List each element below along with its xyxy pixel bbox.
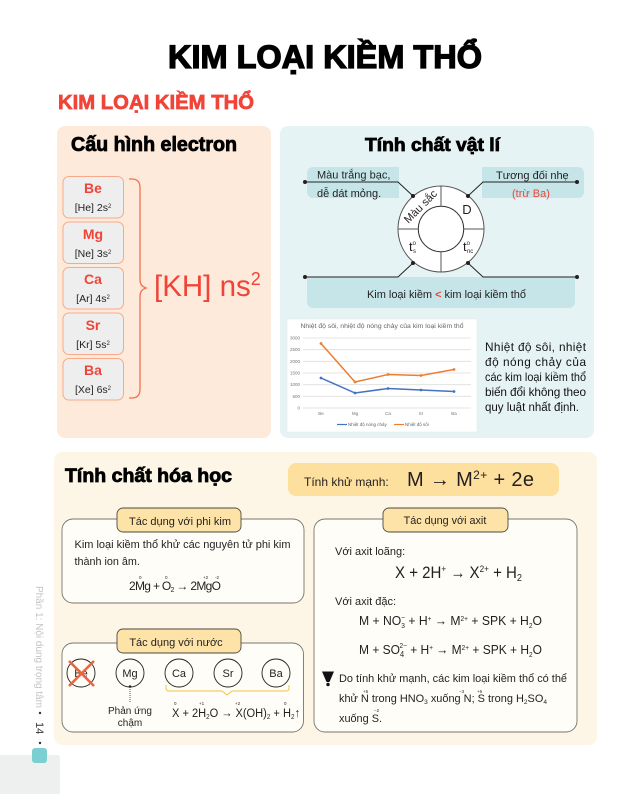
line chart: melting and boiling points: 0: [297, 406, 300, 410]
text: chart commentary: các kim loại kiềm thổ: [485, 370, 586, 384]
equation: nitrate: +: [428, 616, 431, 623]
equation: nitrate: 3: [401, 623, 405, 630]
element: Be crossed out: [67, 659, 95, 687]
card: reaction with acids: [314, 508, 577, 732]
footer tab: [0, 755, 60, 794]
element: Ba: Ba: [269, 668, 284, 680]
equation: metal and water: 2: [291, 714, 295, 721]
equation: nitrate: O: [533, 613, 542, 628]
element card: Be: Be: [84, 180, 102, 196]
element card: Ba: [63, 358, 124, 400]
equation: metal and water: 0: [284, 701, 287, 706]
equation: magnesium and oxygen: 0: [165, 575, 168, 580]
element: Mg: Mg: [122, 668, 138, 680]
equation: nitrate: −: [401, 615, 405, 622]
element card: Ca: 2: [106, 295, 110, 301]
element card: Sr: [Kr] 5s: [76, 339, 106, 351]
element card: Sr: [63, 313, 124, 354]
property wheel: D: [462, 202, 472, 217]
equation: sulfate: +: [429, 645, 433, 652]
text: note on strong reduction: [339, 673, 567, 725]
line chart: melting and boiling points: 2000: [290, 359, 300, 364]
callout: strong reducing property: 2+: [473, 468, 487, 482]
element: Ca: [165, 659, 193, 687]
text: note on strong reduction: xuống S.: [339, 713, 382, 725]
line chart: melting and boiling points: [287, 319, 477, 432]
line chart: melting and boiling points: 500: [292, 394, 300, 399]
card: reaction with non-metals: [62, 508, 304, 603]
equation: dilute acid: 2+: [480, 564, 489, 574]
sidebar: page label: 14: [33, 722, 45, 734]
equation: magnesium and oxygen: 2Mg + O: [129, 579, 171, 593]
text: note on strong reduction: 2: [524, 699, 528, 706]
element card: Mg: [63, 222, 124, 264]
equation: metal and water: 2: [267, 714, 270, 721]
line chart: melting and boiling points: 1500: [290, 370, 300, 376]
equation: metal and water: +2: [235, 701, 241, 706]
text: chart commentary: biến đổi không theo: [485, 385, 586, 399]
equation: sulfate: + SPK + H: [469, 642, 529, 657]
text: note on strong reduction: xuống N; S trong H: [428, 693, 524, 705]
yellow brace: [166, 685, 289, 695]
label: colour: Màu trắng bạc,: [317, 168, 390, 182]
callout: strong reducing property: M → M: [407, 469, 473, 491]
label: melting and boiling comparison: Kim loại kiềm < kim loại kiềm thổ: [367, 289, 526, 301]
element card: Ca: [63, 268, 124, 309]
label: density: Tương đối nhẹ: [496, 170, 569, 182]
element card: Ca: [Ar] 4s: [76, 293, 106, 305]
text: dilute acid: Với axit loãng:: [335, 546, 405, 558]
element card: Sr: Sr: [86, 317, 101, 333]
element: Sr: Sr: [222, 668, 234, 680]
element card: Mg: 2: [108, 250, 112, 256]
element card: Mg: Mg: [83, 226, 103, 242]
label: density: [482, 167, 584, 200]
equation: dilute acid: +: [441, 564, 446, 574]
text: note on strong reduction: khử N trong HNO: [339, 693, 424, 705]
property wheel: Màu sắc: [401, 187, 440, 226]
text: non-metal description: Kim loại kiềm thổ khử các nguyên tử phi kim: [74, 539, 290, 551]
element card: Be: [63, 176, 124, 218]
text: chart commentary: Nhiệt độ sôi, nhiệt: [485, 340, 587, 354]
sidebar: page label: Phần 1: Nội dung trọng tâm: [33, 586, 45, 708]
equation: dilute acid: 2: [517, 573, 522, 584]
text: note on strong reduction: 3: [424, 699, 428, 706]
section heading: KIM LOẠI KIỀM THỔ: [58, 90, 254, 114]
text: note on strong reduction: +6: [477, 689, 483, 694]
equation: metal and water: 2: [206, 714, 210, 721]
equation: sulfate: → M: [433, 642, 462, 657]
label: density: (trừ Ba): [512, 188, 550, 200]
equation: metal and water: 0: [174, 701, 177, 706]
text: note on strong reduction: 4: [543, 699, 547, 706]
label: colour: dễ dát mỏng.: [317, 187, 381, 200]
equation: nitrate: 2+: [461, 616, 468, 623]
element card: Be: 2: [108, 204, 112, 210]
element card: Mg: [Ne] 3s: [75, 248, 108, 260]
equation: sulfate: 2−: [400, 643, 407, 650]
panel: chemical properties: [54, 452, 597, 745]
general configuration formula: [KH] ns: [154, 270, 251, 303]
text: concentrated acid: Với axit đặc:: [335, 596, 396, 608]
element card: Ba: 2: [108, 386, 112, 392]
panel: electron configuration: [57, 126, 271, 438]
equation: dilute acid: + H: [489, 564, 517, 582]
tag: reaction with non-metals: Tác dụng với phi kim: [129, 516, 231, 528]
line chart: melting and boiling points: Nhiệt độ sôi, nhiệt độ nóng chảy của kim loại kiềm thổ: [300, 321, 464, 330]
callout: strong reducing property: Tính khử mạnh:: [304, 475, 389, 489]
tag: reaction with non-metals: [117, 508, 241, 532]
element: Be crossed out: Be: [74, 668, 88, 680]
note: slow reaction: Phản ứng: [108, 706, 152, 717]
property wheel: t: [463, 239, 467, 254]
property wheel: nc: [467, 249, 473, 255]
element card: Ba: Ba: [84, 362, 102, 378]
text: non-metal description: [74, 539, 290, 568]
heading: physical properties: Tính chất vật lí: [365, 135, 501, 155]
equation: sulfate: M + SO: [359, 642, 403, 657]
text: chart commentary: độ nóng chảy của: [485, 355, 586, 369]
line chart: melting and boiling points: Mg: [352, 411, 359, 416]
tag: reaction with water: Tác dụng với nước: [129, 637, 223, 649]
brace: [129, 179, 146, 398]
equation: magnesium and oxygen: +2: [203, 575, 209, 580]
equation: nitrate: 2: [529, 623, 533, 630]
note: slow reaction: [108, 685, 152, 729]
heading: electron configuration: Cấu hình electron: [71, 134, 237, 156]
text: non-metal description: thành ion âm.: [74, 556, 140, 568]
line chart: melting and boiling points: Nhiệt độ sôi: [405, 422, 429, 427]
equation: magnesium and oxygen: -2: [215, 575, 219, 580]
text: note on strong reduction: −2: [374, 708, 380, 713]
property wheel: t: [409, 239, 413, 254]
card: reaction with water: [62, 629, 304, 732]
page marker: [32, 748, 47, 763]
equation: nitrate: M + NO: [359, 613, 404, 628]
equation: dilute acid: X + 2H: [395, 564, 446, 582]
element: Ba: [262, 659, 290, 687]
callout: strong reducing property: [288, 463, 559, 496]
equation: sulfate: 2+: [462, 645, 469, 652]
element card: Be: [He] 2s: [75, 202, 108, 214]
tag: reaction with water: [117, 629, 241, 653]
equation: magnesium and oxygen: [129, 575, 221, 594]
heading: chemical properties: Tính chất hóa học: [65, 466, 232, 487]
line chart: melting and boiling points: Sr: [419, 411, 424, 416]
text: note on strong reduction: −3: [459, 689, 465, 694]
equation: sulfate: + H: [407, 642, 429, 657]
icon: exclamation note: [322, 672, 334, 686]
line chart: melting and boiling points: Be: [318, 411, 324, 416]
label: melting and boiling comparison: [307, 277, 575, 308]
equation: metal and water: +1: [199, 701, 205, 706]
label: colour: [307, 167, 399, 200]
text: note on strong reduction: SO: [528, 693, 543, 705]
equation: sulfate: 2: [529, 652, 533, 659]
text: note on strong reduction: Do tính khử mạnh, các kim loại kiềm thổ có thể: [339, 673, 567, 685]
equation: magnesium and oxygen: → 2MgO: [174, 579, 221, 593]
element: Mg: [116, 659, 144, 687]
line chart: melting and boiling points: 3000: [290, 336, 300, 340]
line chart: melting and boiling points: 1000: [290, 382, 300, 387]
equation: dilute acid: → X: [446, 564, 480, 582]
equation: nitrate: + SPK + H: [468, 613, 529, 628]
note: slow reaction: chậm: [118, 718, 142, 729]
callout: strong reducing property: + 2e: [488, 469, 534, 491]
title: KIM LOẠI KIỀM THỔ: [168, 39, 482, 75]
equation: sulfate: 4: [400, 650, 405, 659]
text: chart commentary: quy luật nhất định.: [485, 402, 579, 414]
property wheel: o: [413, 241, 417, 247]
equation: magnesium and oxygen: 2: [171, 587, 175, 594]
equation: metal and water: ↑: [294, 706, 300, 720]
equation: nitrate: + H: [405, 613, 428, 628]
element card: Ca: Ca: [84, 271, 102, 287]
equation: magnesium and oxygen: 0: [139, 575, 142, 580]
equation: nitrate: → M: [431, 613, 461, 628]
equation: metal and water: [172, 701, 300, 721]
element: Ca: Ca: [172, 668, 187, 680]
tag: reaction with acids: Tác dụng với axit: [404, 515, 486, 527]
equation: metal and water: + H: [270, 706, 291, 720]
equation: metal and water: X + 2H: [172, 706, 210, 720]
line chart: melting and boiling points: Nhiệt độ nóng chảy: [348, 422, 388, 427]
property wheel: s: [413, 249, 416, 255]
line chart: melting and boiling points: 2500: [290, 347, 300, 352]
line chart: melting and boiling points: Ba: [451, 411, 457, 416]
general configuration formula: 2: [251, 269, 261, 289]
connector lines: [303, 180, 579, 279]
equation: sulfate: O: [533, 642, 542, 657]
text: chart commentary: [485, 340, 587, 414]
element card: Ba: [Xe] 6s: [75, 384, 108, 396]
line chart: melting and boiling points: Ca: [385, 411, 391, 416]
panel: physical properties: [280, 126, 594, 438]
element: Sr: [214, 659, 242, 687]
tag: reaction with acids: [383, 508, 508, 532]
equation: metal and water: O → X(OH): [210, 706, 267, 720]
property wheel: [398, 186, 484, 272]
property wheel: o: [467, 241, 471, 247]
text: note on strong reduction: +5: [363, 689, 369, 694]
element card: Sr: 2: [106, 341, 110, 347]
